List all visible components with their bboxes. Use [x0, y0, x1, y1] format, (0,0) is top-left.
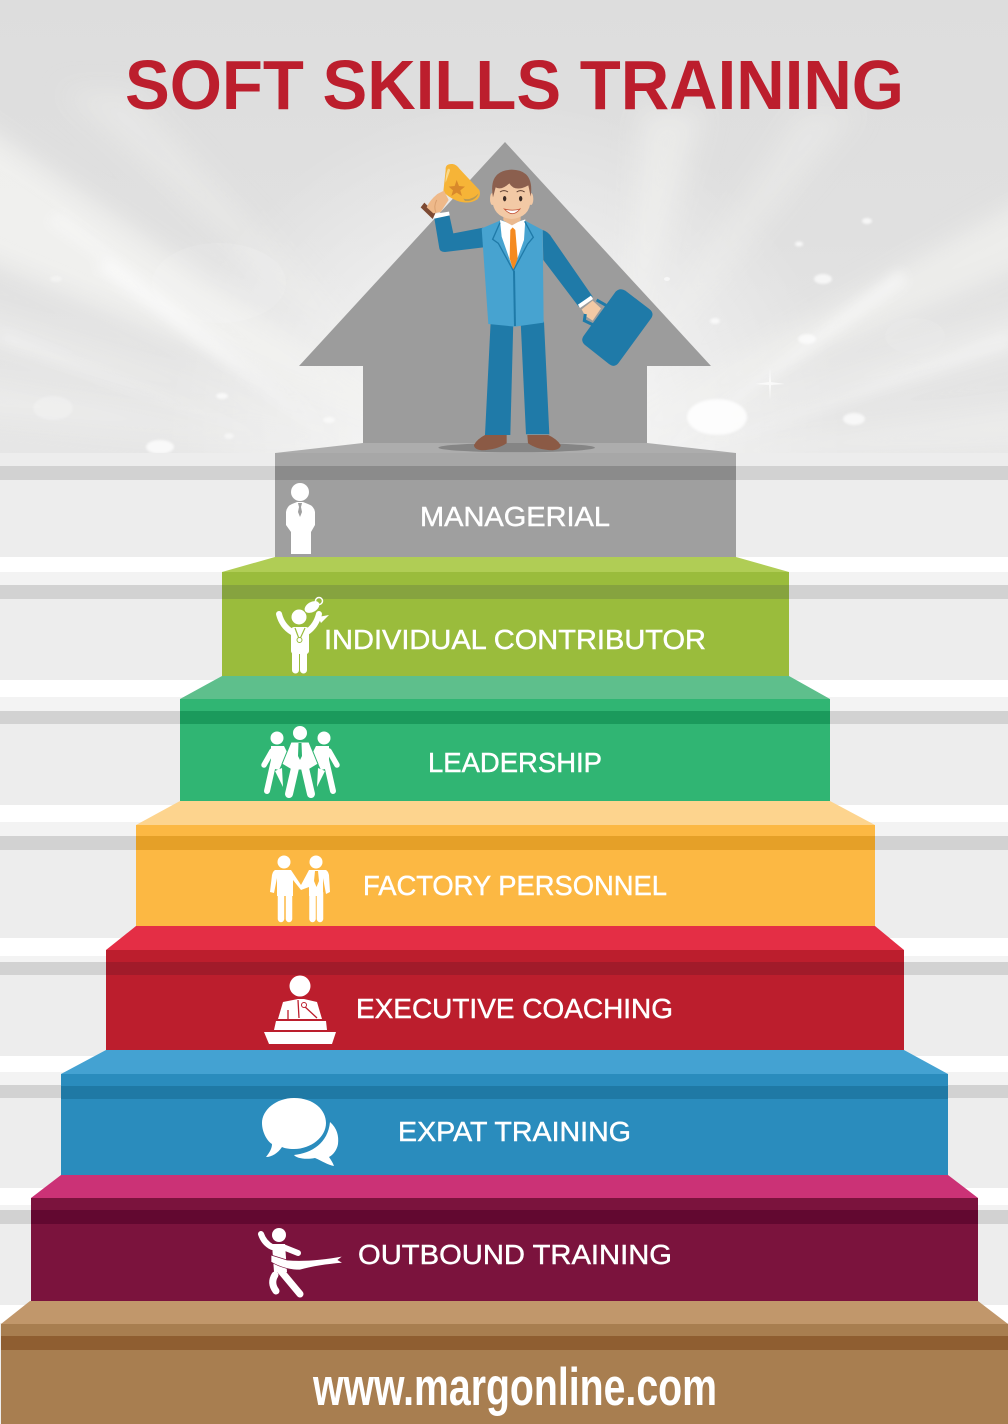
label: EXPAT TRAINING [398, 1116, 631, 1147]
briefcase [582, 289, 653, 366]
shirt and tie [500, 219, 525, 271]
businessman with trophy and briefcase [421, 164, 653, 452]
cuffs [434, 212, 593, 308]
raised arm [434, 215, 483, 252]
website url: www.margonline.com [312, 1358, 717, 1417]
step: leadership [180, 676, 830, 801]
label: MANAGERIAL [420, 501, 610, 532]
bokeh circles [146, 218, 872, 453]
step: individual contributor [222, 557, 789, 676]
label: LEADERSHIP [428, 747, 602, 778]
floor shadow [438, 443, 595, 452]
step: factory personnel [136, 801, 875, 926]
step: website base [1, 1301, 1008, 1424]
step: expat training [61, 1050, 948, 1175]
icon: handshake [270, 856, 330, 919]
label: FACTORY PERSONNEL [363, 870, 667, 901]
icon: speaker at podium [264, 976, 336, 1044]
label: OUTBOUND TRAINING [358, 1239, 672, 1270]
shoes [474, 435, 561, 450]
step: managerial [275, 443, 736, 557]
jacket [482, 221, 544, 327]
icon: businessman [286, 483, 315, 554]
icon: speech bubbles [262, 1098, 338, 1166]
title: SOFT SKILLS TRAINING [125, 46, 904, 124]
step: outbound training [31, 1175, 978, 1301]
label: EXECUTIVE COACHING [356, 993, 673, 1024]
neck and head [490, 170, 533, 225]
step: executive coaching [106, 926, 904, 1050]
trophy [421, 164, 480, 219]
icon: winner with trophy [279, 598, 329, 670]
arrow: upward grey arrow [299, 142, 711, 445]
label: INDIVIDUAL CONTRIBUTOR [324, 624, 706, 655]
lapels [493, 221, 533, 326]
icon: three leaders [264, 726, 337, 794]
trousers [485, 322, 549, 435]
background: light rays and bokeh [0, 0, 1008, 470]
right arm [543, 230, 593, 307]
icon: runner crossing finish ribbon [261, 1228, 343, 1294]
background: wall stripes [0, 453, 1008, 1424]
